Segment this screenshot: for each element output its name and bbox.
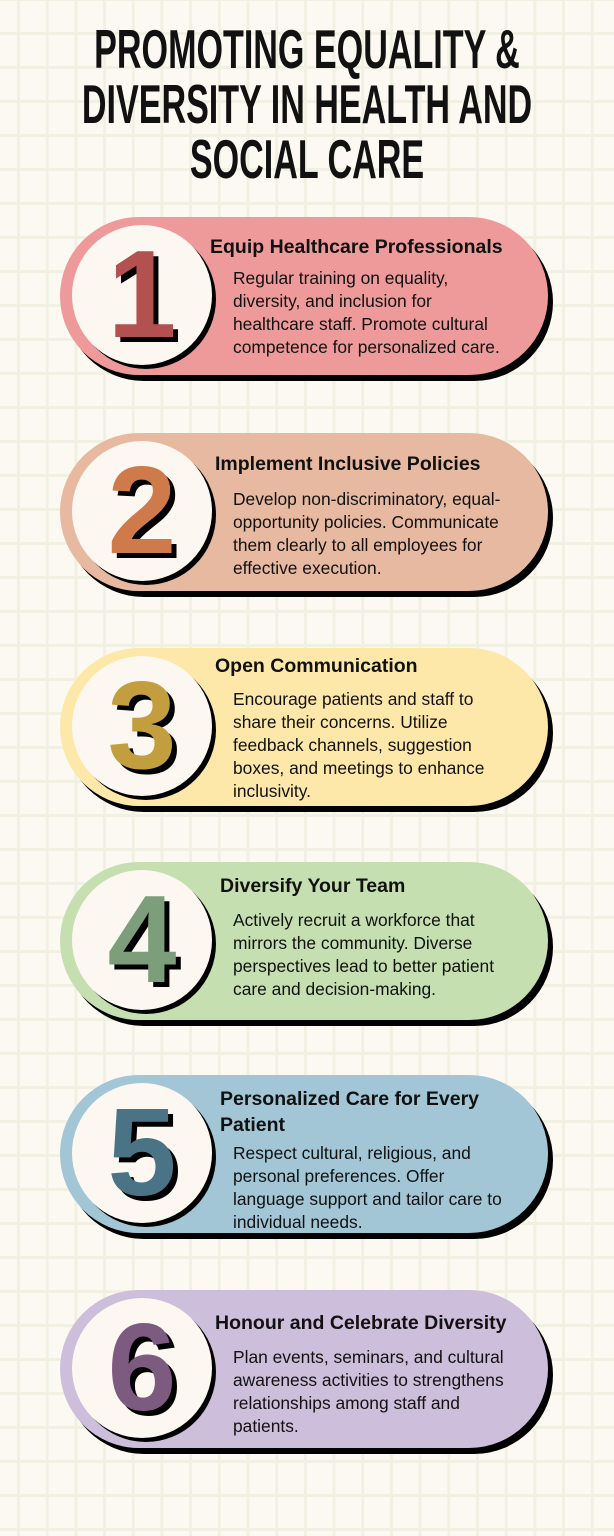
heading 1: Equip Healthcare Professionals bbox=[210, 236, 503, 258]
body 3: share their concerns. Utilize bbox=[233, 712, 448, 732]
body 1: healthcare staff. Promote cultural bbox=[233, 314, 488, 334]
heading 5: Personalized Care for Every bbox=[220, 1088, 479, 1110]
heading 5: Patient bbox=[220, 1114, 285, 1136]
heading 6: Honour and Celebrate Diversity bbox=[215, 1312, 506, 1334]
panel: 2 policies bbox=[60, 433, 553, 597]
number 3: 3 bbox=[108, 657, 176, 795]
panel: 1 equip bbox=[60, 217, 553, 381]
body 6: patients. bbox=[233, 1416, 299, 1436]
body 5: personal preferences. Offer bbox=[233, 1166, 444, 1186]
body 3 bbox=[233, 689, 484, 801]
body 1: competence for personalized care. bbox=[233, 337, 500, 357]
body 6 bbox=[233, 1347, 504, 1436]
number 1: 1 bbox=[108, 226, 176, 364]
body 1: diversity, and inclusion for bbox=[233, 291, 432, 311]
body 4: Actively recruit a workforce that bbox=[233, 910, 475, 930]
body 4: care and decision-making. bbox=[233, 979, 436, 999]
title: PROMOTING EQUALITY & bbox=[94, 18, 520, 80]
heading 4: Diversify Your Team bbox=[220, 875, 405, 897]
panel: 5 personalized bbox=[60, 1075, 553, 1239]
body 2 bbox=[233, 489, 500, 578]
panel: 3 communication bbox=[60, 648, 553, 812]
body 4 bbox=[233, 910, 494, 999]
body 5: individual needs. bbox=[233, 1212, 363, 1232]
heading 5 bbox=[220, 1088, 479, 1136]
heading 2: Implement Inclusive Policies bbox=[215, 453, 481, 475]
body 5 bbox=[233, 1143, 502, 1232]
number 4: 4 bbox=[108, 871, 176, 1009]
body 2: them clearly to all employees for bbox=[233, 535, 482, 555]
body 5: Respect cultural, religious, and bbox=[233, 1143, 471, 1163]
body 3: boxes, and meetings to enhance bbox=[233, 758, 484, 778]
title: SOCIAL CARE bbox=[190, 128, 424, 190]
body 2: Develop non-discriminatory, equal- bbox=[233, 489, 500, 509]
body 1: Regular training on equality, bbox=[233, 268, 448, 288]
body 6: awareness activities to strengthens bbox=[233, 1370, 504, 1390]
title bbox=[82, 18, 532, 190]
number 2: 2 bbox=[108, 442, 176, 580]
body 5: language support and tailor care to bbox=[233, 1189, 502, 1209]
body 4: mirrors the community. Diverse bbox=[233, 933, 472, 953]
body 3: feedback channels, suggestion bbox=[233, 735, 472, 755]
number 6: 6 bbox=[108, 1299, 176, 1437]
panel: 6 celebrate bbox=[60, 1290, 553, 1454]
panel: 4 team bbox=[60, 862, 553, 1026]
body 6: Plan events, seminars, and cultural bbox=[233, 1347, 504, 1367]
body 1 bbox=[233, 268, 500, 357]
body 2: opportunity policies. Communicate bbox=[233, 512, 499, 532]
number 5: 5 bbox=[108, 1084, 176, 1222]
heading 3: Open Communication bbox=[215, 655, 418, 677]
body 3: inclusivity. bbox=[233, 781, 311, 801]
body 2: effective execution. bbox=[233, 558, 382, 578]
title: DIVERSITY IN HEALTH AND bbox=[82, 73, 532, 135]
body 6: relationships among staff and bbox=[233, 1393, 460, 1413]
body 3: Encourage patients and staff to bbox=[233, 689, 473, 709]
body 4: perspectives lead to better patient bbox=[233, 956, 494, 976]
